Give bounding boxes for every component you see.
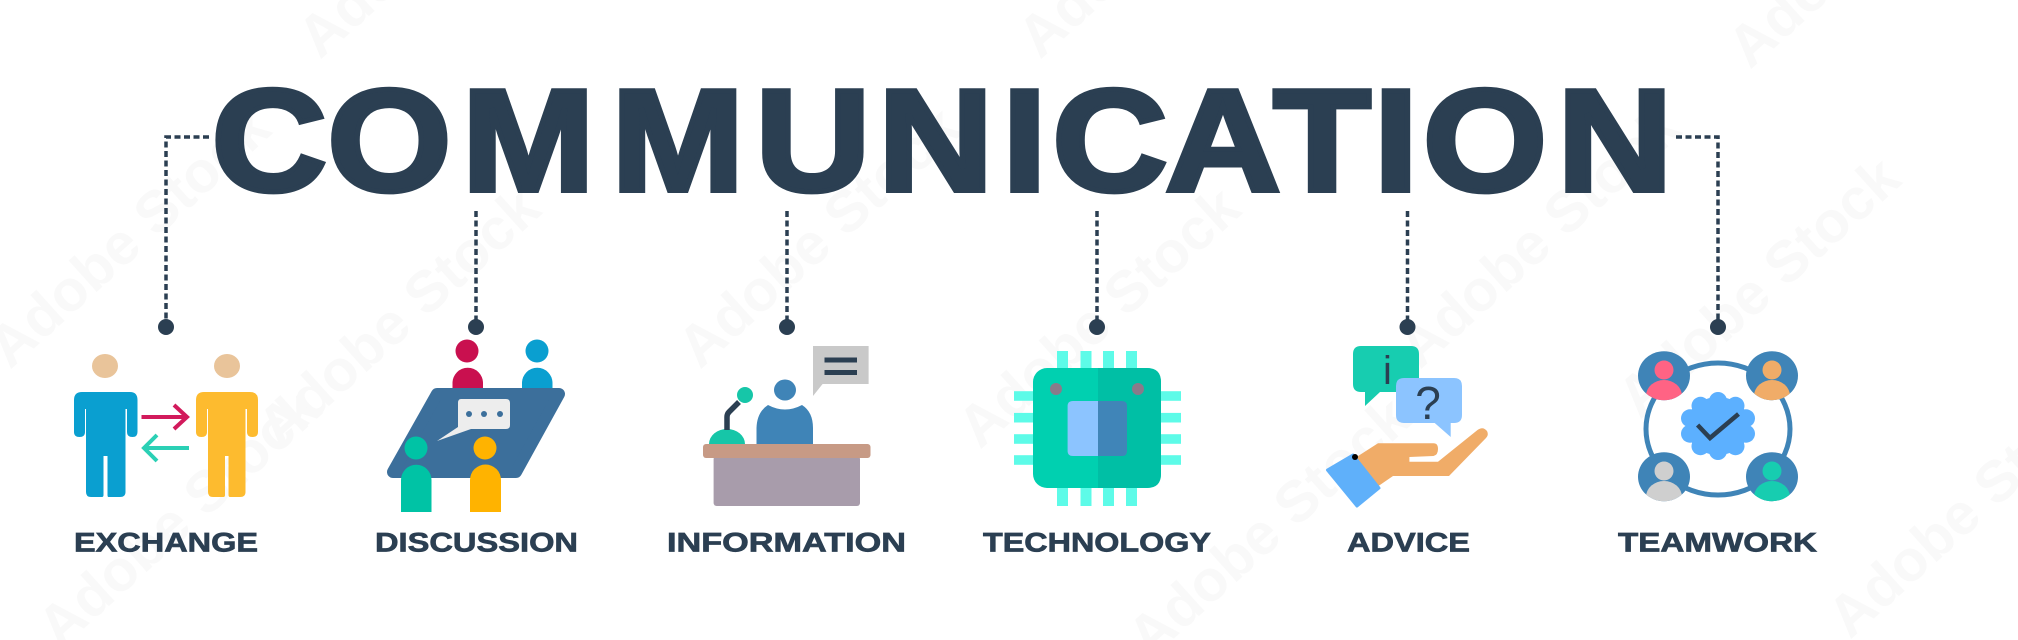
text: Adobe Stock xyxy=(245,174,553,460)
icon: advice: ? xyxy=(1415,377,1441,429)
icon: exchange xyxy=(74,354,258,497)
label: information: INFORMATION xyxy=(667,528,906,558)
text: Adobe Stock xyxy=(1605,144,1913,430)
icon: technology xyxy=(1014,351,1181,506)
connector: advice xyxy=(1400,211,1416,335)
text: Adobe Stock xyxy=(945,174,1253,460)
title: COMMUNICATION xyxy=(212,60,1673,222)
connector: exchange xyxy=(158,137,209,335)
connector: information xyxy=(779,211,795,335)
connector: teamwork xyxy=(1676,137,1726,335)
label: technology: TECHNOLOGY xyxy=(983,528,1211,558)
text: Adobe Stock xyxy=(665,94,973,380)
icon: advice xyxy=(1328,346,1488,506)
icon: teamwork xyxy=(1638,351,1798,513)
label: teamwork: TEAMWORK xyxy=(1618,528,1818,558)
connector: technology xyxy=(1089,211,1105,335)
icon: discussion xyxy=(393,340,559,512)
connector: discussion xyxy=(468,211,484,335)
label: exchange: EXCHANGE xyxy=(74,528,258,558)
text: Adobe Stock xyxy=(1385,94,1693,380)
label: advice: ADVICE xyxy=(1347,528,1470,558)
icon: information xyxy=(703,346,870,506)
icon: advice: i xyxy=(1383,349,1392,393)
label: discussion: DISCUSSION xyxy=(375,528,578,558)
